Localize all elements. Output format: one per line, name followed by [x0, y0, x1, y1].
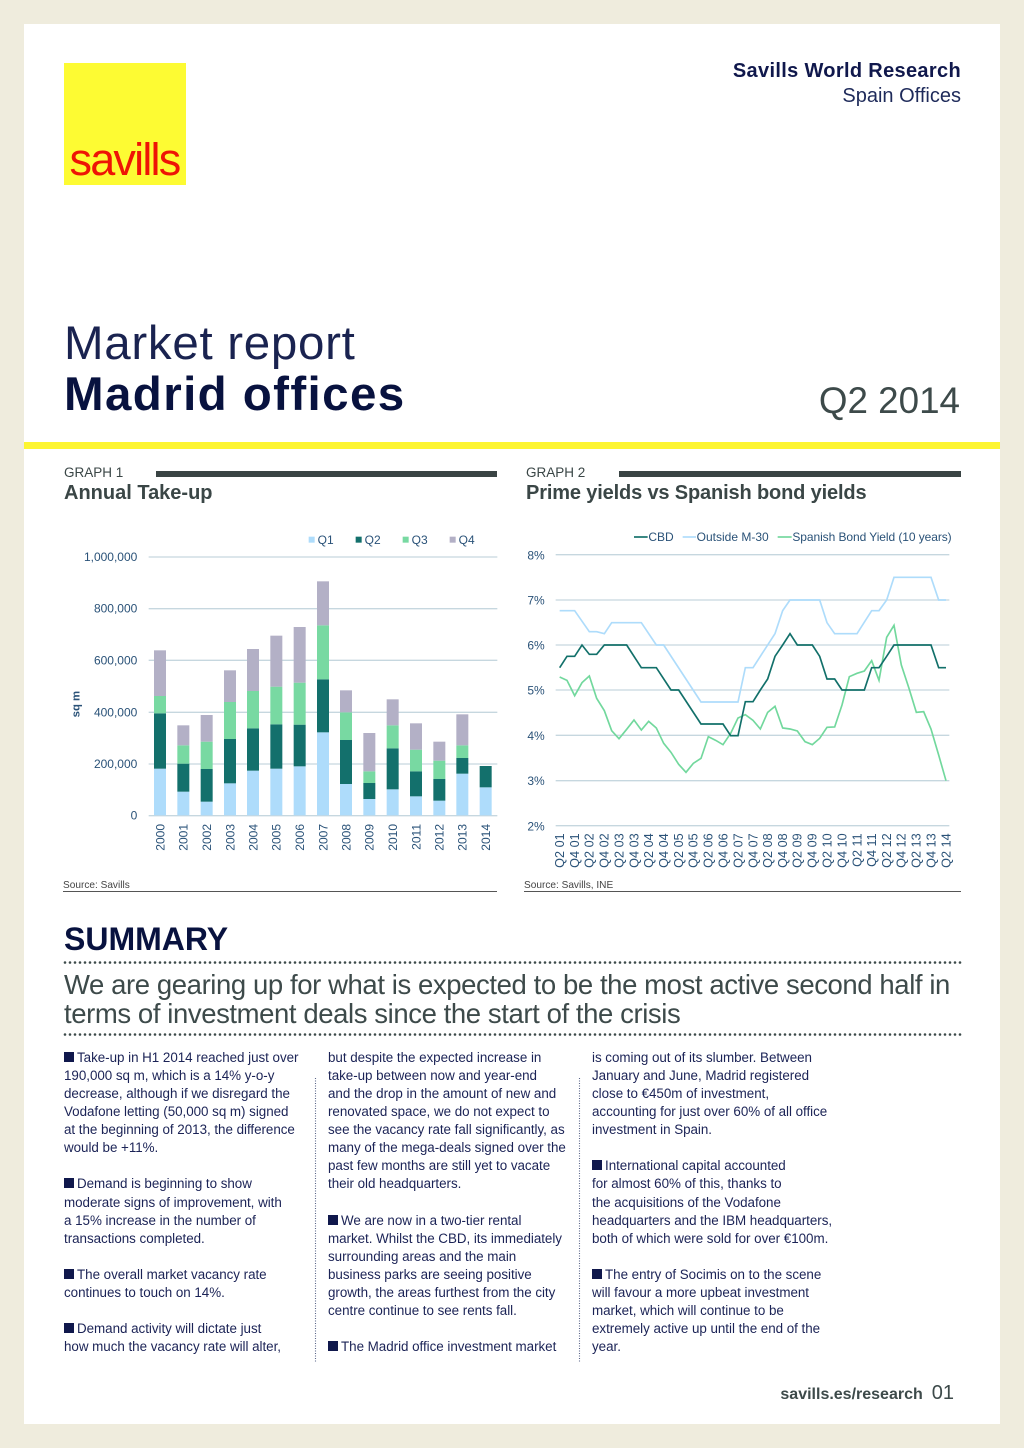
legend: Q1 — [318, 533, 334, 547]
text column 3: the acquisitions of the Vodafone — [592, 1194, 781, 1210]
text column 2: surrounding areas and the main — [328, 1249, 516, 1264]
x axis labels: 2014 — [479, 824, 493, 851]
text column 2: centre continue to see rents fall. — [328, 1303, 517, 1318]
x axis labels: Q2 05 — [672, 833, 686, 868]
y axis labels: 600,000 — [94, 653, 138, 667]
x axis labels: Q4 11 — [865, 833, 879, 867]
x axis labels: Q2 13 — [910, 833, 924, 868]
summary subheading — [64, 969, 950, 1029]
legend: Q3 — [412, 533, 428, 547]
text column 3: headquarters and the IBM headquarters, — [592, 1213, 832, 1228]
y axis labels: 8% — [527, 548, 545, 562]
graph 2 heading — [526, 464, 961, 504]
series: Q3 — [154, 625, 468, 783]
text column 2: The Madrid office investment market — [341, 1339, 556, 1354]
x axis labels: Q4 07 — [746, 833, 760, 868]
y axis labels — [527, 548, 545, 833]
text column 1: Take-up in H1 2014 reached just over — [77, 1050, 298, 1065]
y axis labels: 400,000 — [94, 705, 138, 719]
x axis labels: 2003 — [223, 824, 237, 851]
graph 1 heading — [64, 464, 497, 504]
y axis labels: 2% — [527, 819, 545, 833]
x axis labels: 2007 — [316, 824, 330, 851]
x axis labels: Q4 05 — [687, 833, 701, 868]
text column 1: Demand is beginning to show — [77, 1176, 252, 1191]
series: Q2 — [154, 679, 492, 802]
text column 2: past few months are still yet to vacate — [328, 1158, 550, 1173]
text column 3: extremely active up until the end of the — [592, 1321, 820, 1336]
text column 1: a 15% increase in the number of — [64, 1213, 256, 1228]
text column 2: business parks are seeing positive — [328, 1267, 532, 1282]
text column 3: The entry of Socimis on to the scene — [605, 1267, 821, 1282]
title: Madrid offices — [64, 368, 406, 421]
series: Q1 — [154, 732, 492, 815]
source: graph 1 — [63, 879, 497, 892]
title: Market report — [64, 316, 356, 370]
text column 1: would be +11%. — [64, 1140, 158, 1155]
text column 3: accounting for just over 60% of all office — [592, 1104, 827, 1119]
text column 3: investment in Spain. — [592, 1122, 712, 1137]
text column 2: growth, the areas furthest from the city — [328, 1285, 555, 1300]
series: Q4 — [154, 581, 468, 771]
title — [64, 316, 406, 421]
text column 2: renovated space, we do not expect to — [328, 1104, 550, 1119]
x axis labels: Q2 06 — [702, 833, 716, 868]
text column 3: is coming out of its slumber. Between — [592, 1050, 812, 1065]
x axis labels: 2005 — [270, 824, 284, 851]
x axis labels: Q4 08 — [776, 833, 790, 868]
text column 2: and the drop in the amount of new and — [328, 1086, 556, 1101]
text column 3 — [592, 1050, 832, 1354]
x axis labels: Q4 13 — [924, 833, 938, 868]
x axis labels: Q2 04 — [642, 833, 656, 868]
x axis labels: 2000 — [153, 824, 167, 851]
text column 2: market. Whilst the CBD, its immediately — [328, 1231, 562, 1246]
y axis labels: 6% — [527, 639, 545, 653]
text column 3: International capital accounted — [605, 1158, 786, 1173]
text column 2: take-up between now and year-end — [328, 1068, 537, 1083]
header: research label: Spain Offices — [842, 85, 961, 107]
y axis labels: 800,000 — [94, 602, 138, 616]
y axis labels: 0 — [131, 809, 138, 823]
x axis labels: 2002 — [200, 824, 214, 851]
text column 2: many of the mega-deals signed over the — [328, 1140, 566, 1155]
x axis labels: Q4 03 — [627, 833, 641, 868]
header: research label — [733, 60, 961, 107]
x axis labels: Q4 10 — [835, 833, 849, 868]
x axis labels: Q4 02 — [598, 833, 612, 868]
y axis labels: 4% — [527, 729, 545, 743]
text column 1: decrease, although if we disregard the — [64, 1086, 290, 1101]
summary subheading: terms of investment deals since the start of the crisis — [64, 998, 680, 1029]
y axis labels: 200,000 — [94, 757, 138, 771]
text column 3: market, which will continue to be — [592, 1303, 784, 1318]
text column 1: Vodafone letting (50,000 sq m) signed — [64, 1104, 288, 1119]
graph 2 heading: Prime yields vs Spanish bond yields — [526, 482, 866, 504]
x axis labels: Q2 14 — [939, 833, 953, 868]
x axis labels: Q2 11 — [850, 833, 864, 867]
graph 1 heading: Annual Take-up — [64, 482, 213, 504]
y axis labels: 5% — [527, 684, 545, 698]
line: Outside M-30 — [560, 577, 946, 702]
x axis labels: Q2 12 — [880, 833, 894, 868]
text column 1: moderate signs of improvement, with — [64, 1194, 282, 1210]
text column 3: year. — [592, 1339, 621, 1354]
text column 2: see the vacancy rate fall significantly, as — [328, 1122, 565, 1137]
x axis labels: 2001 — [177, 824, 191, 851]
x axis labels: Q4 09 — [806, 833, 820, 868]
source: graph 1: Source: Savills — [63, 880, 130, 891]
source: graph 2: Source: Savills, INE — [524, 880, 613, 891]
text column 3: January and June, Madrid registered — [592, 1068, 809, 1083]
x axis labels: 2009 — [363, 824, 377, 851]
text column 3: both of which were sold for over €100m. — [592, 1231, 828, 1246]
x axis labels: Q2 03 — [612, 833, 626, 868]
text column 1: The overall market vacancy rate — [77, 1267, 267, 1282]
text column 3: will favour a more upbeat investment — [592, 1285, 809, 1300]
yellow divider band — [24, 442, 1000, 449]
summary heading: SUMMARY — [64, 921, 228, 957]
x axis labels: Q4 06 — [716, 833, 730, 868]
text column 3: for almost 60% of this, thanks to — [592, 1176, 782, 1191]
legend: CBD — [648, 530, 674, 544]
text column 3: close to €450m of investment, — [592, 1086, 769, 1101]
legend: Spanish Bond Yield (10 years) — [792, 530, 952, 544]
x axis labels — [153, 824, 493, 851]
x axis labels: Q2 09 — [791, 833, 805, 868]
y axis title: sq m — [70, 691, 82, 717]
legend — [634, 530, 952, 544]
x axis labels: Q2 02 — [583, 833, 597, 868]
x axis labels: Q2 01 — [553, 833, 567, 868]
x axis labels: 2006 — [293, 824, 307, 851]
x axis labels: 2011 — [409, 824, 423, 850]
x axis labels — [553, 833, 953, 868]
y axis labels: 7% — [527, 594, 545, 608]
text column 1: how much the vacancy rate will alter, — [64, 1339, 281, 1354]
source: graph 2 — [524, 879, 961, 892]
legend — [309, 533, 475, 547]
legend: Q2 — [365, 533, 381, 547]
x axis labels: Q4 12 — [895, 833, 909, 868]
text column 1: 190,000 sq m, which is a 14% y-o-y — [64, 1068, 274, 1083]
x axis labels: Q2 10 — [820, 833, 834, 868]
text column 1 — [64, 1050, 298, 1354]
date: Q2 2014: Q2 2014 — [819, 380, 960, 421]
header: research label: Savills World Research — [733, 60, 961, 82]
y axis labels: 3% — [527, 774, 545, 788]
footer: savills.es/research 01 — [780, 1382, 954, 1404]
text column 2 — [328, 1050, 566, 1354]
text column 1: transactions completed. — [64, 1231, 205, 1246]
logo: savills — [64, 63, 186, 185]
line: Spanish Bond Yield — [560, 625, 946, 781]
logo: savills: savills — [70, 134, 179, 185]
x axis labels: 2004 — [246, 824, 260, 851]
line: CBD — [560, 634, 946, 736]
text column 2: their old headquarters. — [328, 1176, 461, 1191]
x axis labels: Q4 01 — [568, 833, 582, 868]
x axis labels: 2013 — [456, 824, 470, 851]
line chart: yields — [527, 530, 953, 868]
x axis labels: Q4 04 — [657, 833, 671, 868]
text column 1: continues to touch on 14%. — [64, 1285, 225, 1300]
graph 1 heading: GRAPH 1 — [64, 464, 123, 480]
text column 2: but despite the expected increase in — [328, 1050, 541, 1065]
y axis labels: 1,000,000 — [84, 550, 138, 564]
x axis labels: Q2 07 — [731, 833, 745, 868]
legend: Q4 — [459, 533, 475, 547]
x axis labels: Q2 08 — [761, 833, 775, 868]
text column 2: We are now in a two-tier rental — [341, 1213, 521, 1228]
x axis labels: 2012 — [433, 824, 447, 851]
summary subheading: We are gearing up for what is expected to be the most active second half in — [64, 969, 950, 1000]
bar chart: annual take-up — [70, 533, 498, 851]
graph 2 heading: GRAPH 2 — [526, 464, 585, 480]
text column 1: Demand activity will dictate just — [77, 1321, 261, 1336]
y axis labels — [84, 550, 138, 823]
x axis labels: 2010 — [386, 824, 400, 851]
legend: Outside M-30 — [697, 530, 769, 544]
x axis labels: 2008 — [339, 824, 353, 851]
text column 1: at the beginning of 2013, the difference — [64, 1122, 295, 1137]
